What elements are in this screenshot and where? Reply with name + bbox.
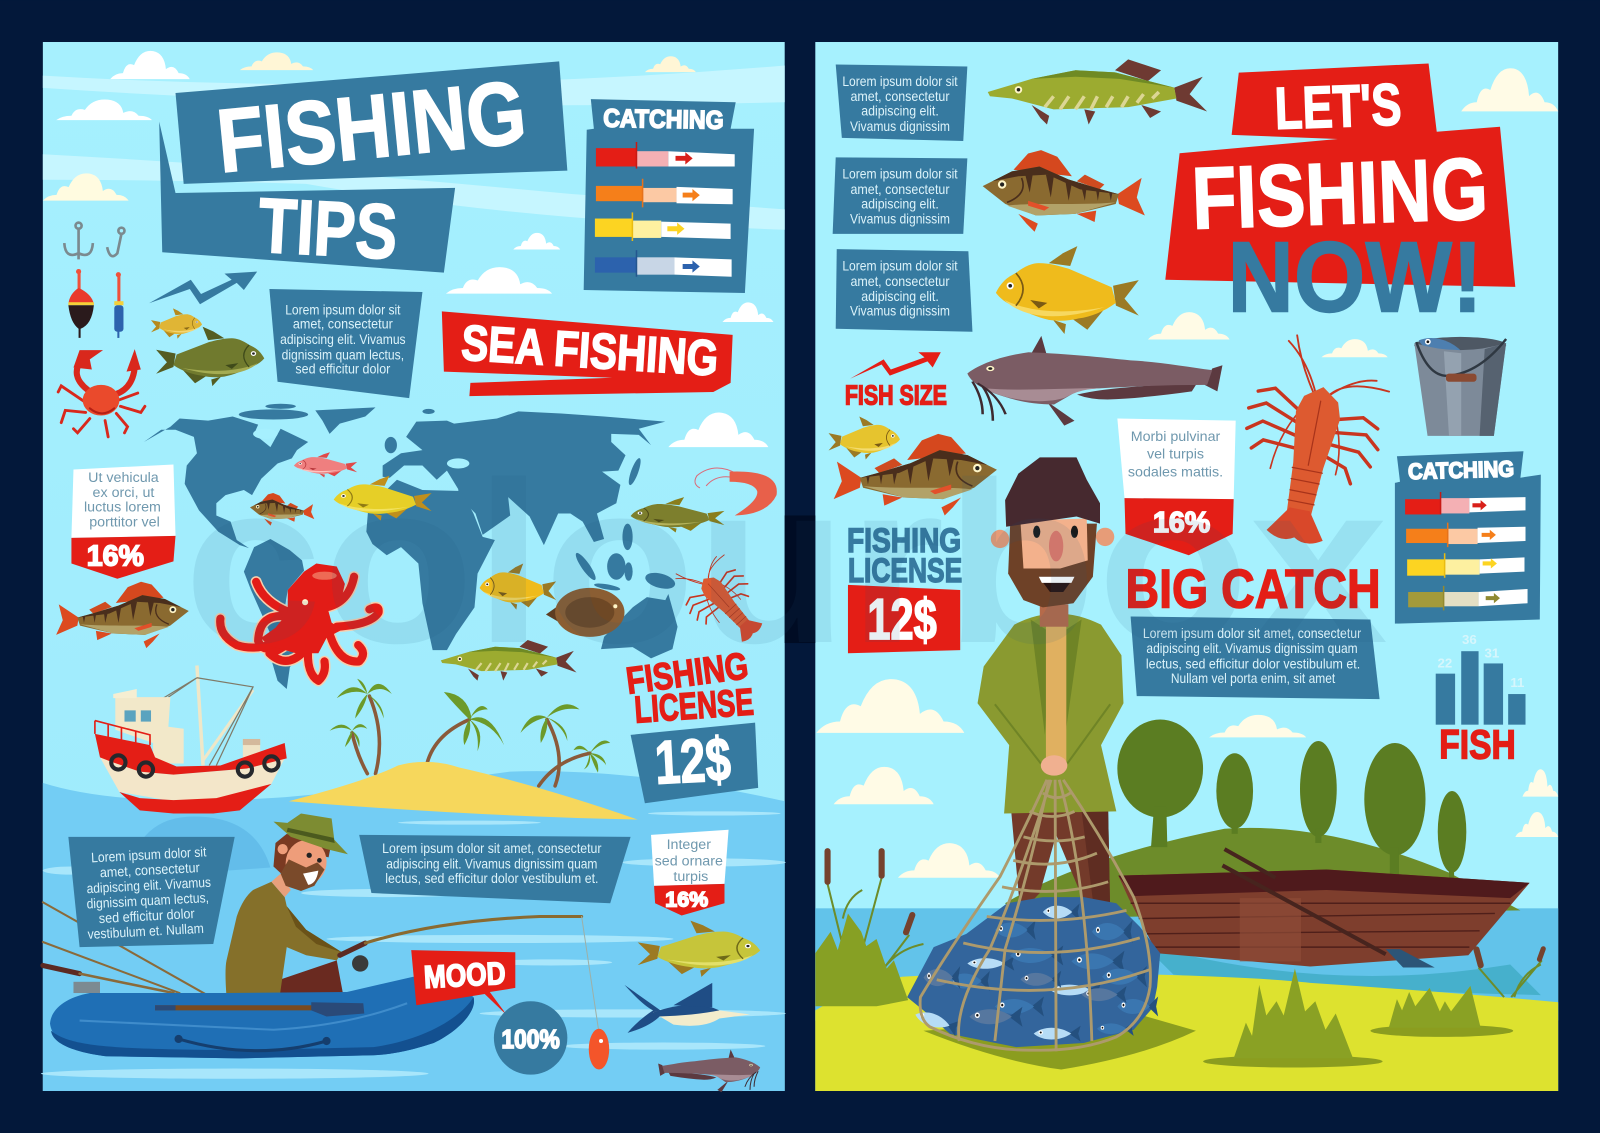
text block: lorem top: amet, consectetur xyxy=(293,317,393,332)
inland seas xyxy=(253,429,469,469)
fish: marlin xyxy=(624,983,750,1033)
icon: bucket with fish xyxy=(1414,330,1506,436)
icon: fishing trawler xyxy=(95,665,287,813)
fishing rods in boat xyxy=(43,902,207,995)
far hill xyxy=(1005,828,1520,919)
icon: big lobster xyxy=(1225,329,1396,553)
card: lower 16 percent xyxy=(651,830,729,915)
rowboat wake xyxy=(1143,944,1541,995)
icon: bobber fish xyxy=(589,1029,609,1070)
panel: let's fishing now (right poster) xyxy=(815,42,1558,1091)
text block: lorem three: adipiscing elit. xyxy=(861,289,939,304)
text block: lorem center: adipiscing elit. Vivamus dignissim quam xyxy=(386,857,597,872)
text block: lorem one: Vivamus dignissim xyxy=(850,119,950,134)
heading banner: tips xyxy=(159,122,455,276)
heading banner: fishing xyxy=(176,61,567,192)
label: right fishing license: FISHING xyxy=(847,522,961,560)
text block: lorem three: amet, consectetur xyxy=(851,274,950,289)
blue bar xyxy=(595,250,732,277)
reed heads xyxy=(824,848,1547,969)
label: right fishing license: LICENSE xyxy=(848,552,962,590)
heading banner: sea fishing: SEA FISHING xyxy=(460,315,720,387)
fish: gold carp xyxy=(996,246,1139,334)
fish: left perch xyxy=(56,582,189,648)
price box xyxy=(848,585,960,653)
text block: lorem lower left: adipiscing elit. Vivamus xyxy=(86,875,211,896)
callout: mood flag xyxy=(411,950,515,1015)
card: lower 16 percent: 16% xyxy=(665,887,708,911)
heading text: let's: LET'S xyxy=(1274,71,1402,142)
card: lower 16 percent: Integer xyxy=(667,837,711,853)
lake water xyxy=(815,908,1558,1021)
card: right 16 percent: vel turpis xyxy=(1147,446,1204,462)
bar chart: fish: 22 xyxy=(1438,656,1452,671)
card: left 16 percent: luctus lorem xyxy=(84,499,161,515)
text block: lorem two: adipiscing elit. xyxy=(861,196,939,211)
gutter shadow xyxy=(785,515,815,643)
wave highlights xyxy=(41,811,786,1079)
fish: small gold xyxy=(829,416,900,460)
sky background xyxy=(43,42,785,1091)
fish: small perch xyxy=(250,493,314,526)
heading text: fishing: FISHING xyxy=(213,63,530,192)
fishing rod with line xyxy=(340,916,599,1033)
text block: lorem lower left xyxy=(68,837,235,947)
boat reflection xyxy=(128,816,270,878)
card: left 16 percent: porttitor vel xyxy=(89,515,160,531)
text block: lorem two: Vivamus dignissim xyxy=(850,212,950,227)
fish: pink salmon xyxy=(294,452,357,478)
trees xyxy=(1117,720,1466,880)
text block: lorem three: Vivamus dignissim xyxy=(850,303,950,318)
olive bar xyxy=(1408,586,1528,610)
bar chart: fish: 11 xyxy=(1510,675,1524,690)
label: fish size: FISH SIZE xyxy=(845,379,947,410)
text block: lorem center xyxy=(359,835,631,903)
text block: lorem two xyxy=(833,157,967,234)
fish: flounder xyxy=(546,588,624,637)
text block: big catch: Lorem ipsum dolor sit amet, consectetur xyxy=(1143,626,1362,641)
heading banner: let's fishing xyxy=(1165,63,1515,287)
card: left 16 percent: ex orci, ut xyxy=(93,485,154,501)
panel: catching progress bars xyxy=(584,99,754,293)
yellow bar xyxy=(595,212,731,241)
net shadow xyxy=(923,1015,1196,1070)
boat oars xyxy=(1222,849,1435,968)
icon: crab xyxy=(58,349,145,437)
label: right fishing license: 12$ xyxy=(867,588,937,652)
text block: lorem two: Lorem ipsum dolor sit xyxy=(842,167,958,182)
icon: small lobster xyxy=(664,541,777,657)
icon: octopus xyxy=(220,563,379,681)
heading text: fishing: FISHING xyxy=(1190,140,1489,248)
arrow: growth zigzag xyxy=(149,272,257,304)
card: right 16 percent: Morbi pulvinar xyxy=(1131,429,1221,445)
card: right 16 percent: sodales mattis. xyxy=(1128,465,1223,481)
illustration: seated fisherman xyxy=(226,813,348,998)
text block: lorem center: Lorem ipsum dolor sit amet, consectetur xyxy=(382,841,602,856)
heading text: now: NOW! xyxy=(1228,221,1483,333)
text block: lorem lower left: amet, consectetur xyxy=(99,860,200,880)
card: left 16 percent xyxy=(71,464,176,579)
heading text: tips: TIPS xyxy=(256,183,399,276)
icon: fishing hooks xyxy=(64,223,124,259)
panel: catching right xyxy=(1395,451,1541,624)
panel: fishing tips (left poster) xyxy=(41,42,786,1092)
text block: big catch xyxy=(1131,616,1380,699)
chart label: FISH xyxy=(1439,721,1516,767)
price box xyxy=(631,723,758,803)
text block: lorem lower left: vestibulum et. Nullam xyxy=(87,921,204,942)
text block: lorem lower left: dignissim quam lectus, xyxy=(86,890,209,911)
text block: lorem top: dignissim quam lectus, xyxy=(282,347,404,362)
card: lower 16 percent: turpis xyxy=(673,869,708,885)
fish: pike xyxy=(988,59,1207,125)
fish: catfish xyxy=(967,336,1222,426)
callout: 100 percent: 100% xyxy=(502,1026,560,1054)
text block: lorem lower left: Lorem ipsum dolor sit xyxy=(91,844,207,865)
fish: small yellow xyxy=(151,308,202,339)
illustration: rowboat xyxy=(1118,849,1530,968)
bar chart: fish: 36 xyxy=(1462,632,1477,647)
illustration: standing fisherman xyxy=(978,457,1123,913)
text block: lorem top: sed efficitur dolor xyxy=(295,362,391,377)
fish: right perch xyxy=(834,434,997,515)
label: fishing license: LICENSE xyxy=(633,680,755,731)
text block: lorem one: adipiscing elit. xyxy=(861,103,939,118)
arrow: fish size xyxy=(850,352,941,379)
grass center xyxy=(1203,969,1383,1068)
text block: lorem one: amet, consectetur xyxy=(851,89,950,104)
icon: fishing floats xyxy=(68,269,123,338)
grass right xyxy=(1370,986,1513,1037)
text block: lorem top: adipiscing elit. Vivamus xyxy=(280,332,406,347)
text block: lorem three: Lorem ipsum dolor sit xyxy=(842,259,958,274)
world map xyxy=(144,404,678,689)
text block: big catch: Nullam vel porta enim, sit amet xyxy=(1171,671,1335,686)
sky background xyxy=(815,42,1558,1091)
catching title: CATCHING xyxy=(603,105,724,135)
reeds xyxy=(828,878,1542,997)
illustration: palm island xyxy=(289,679,638,820)
text block: lorem one: Lorem ipsum dolor sit xyxy=(842,74,958,89)
red bar xyxy=(596,142,735,169)
lime ground xyxy=(815,973,1558,1091)
fish: perch xyxy=(983,150,1145,232)
icon: shrimp xyxy=(695,468,777,515)
red bar xyxy=(1405,492,1526,514)
illustration: net full of fish xyxy=(907,780,1160,1051)
text block: lorem center: lectus, sed efficitur dolor vestibulum et. xyxy=(385,871,598,886)
text block: lorem three xyxy=(836,249,972,332)
fish: green perch xyxy=(631,497,724,533)
card: left 16 percent: 16% xyxy=(87,540,144,572)
card: lower 16 percent: sed ornare xyxy=(655,853,723,869)
text block: lorem one xyxy=(836,64,967,141)
text block: big catch: adipiscing elit. Vivamus dignissim quam xyxy=(1146,641,1358,656)
fish: map pike xyxy=(441,640,577,681)
card: right 16 percent: 16% xyxy=(1153,507,1210,539)
bar chart: fish: 31 xyxy=(1484,645,1499,660)
fish: lower carp xyxy=(638,921,760,977)
boat oar xyxy=(155,1002,364,1016)
fish: gold carp xyxy=(480,563,556,610)
text block: lorem top: Lorem ipsum dolor sit xyxy=(285,302,401,317)
text block: lorem top xyxy=(269,289,422,398)
sea water xyxy=(43,771,785,1091)
card: right 16 percent xyxy=(1117,419,1236,555)
text block: lorem lower left: sed efficitur dolor xyxy=(98,906,195,926)
text block: lorem two: amet, consectetur xyxy=(851,182,950,197)
orange bar xyxy=(1406,523,1526,547)
text block: big catch: lectus, sed efficitur dolor vestibulum et. xyxy=(1146,657,1360,672)
heading: big catch: BIG CATCH xyxy=(1126,557,1381,619)
island sand xyxy=(289,762,638,820)
bar chart: fish xyxy=(1436,632,1526,767)
clouds right poster xyxy=(816,68,1558,878)
catching title: CATCHING xyxy=(1408,456,1514,484)
label: fishing license xyxy=(624,644,758,803)
fish: yellow carp xyxy=(334,476,432,521)
card: left 16 percent: Ut vehicula xyxy=(88,470,159,486)
fish: green carp xyxy=(156,327,264,386)
orange bar xyxy=(596,179,733,207)
yellow bar xyxy=(1407,553,1524,578)
label: fishing license: FISHING xyxy=(624,644,751,702)
label: fishing license: 12$ xyxy=(653,725,732,797)
label: right fishing license xyxy=(847,522,962,653)
watermark: colourbox xyxy=(184,434,1388,691)
callout: mood flag: MOOD xyxy=(423,955,506,995)
sky bands xyxy=(43,65,785,230)
callout: 100 percent xyxy=(494,1001,567,1075)
inflatable boat xyxy=(50,977,474,1058)
fish: small catfish xyxy=(658,1050,760,1092)
clouds left poster xyxy=(43,51,773,447)
grass left xyxy=(815,913,908,1006)
